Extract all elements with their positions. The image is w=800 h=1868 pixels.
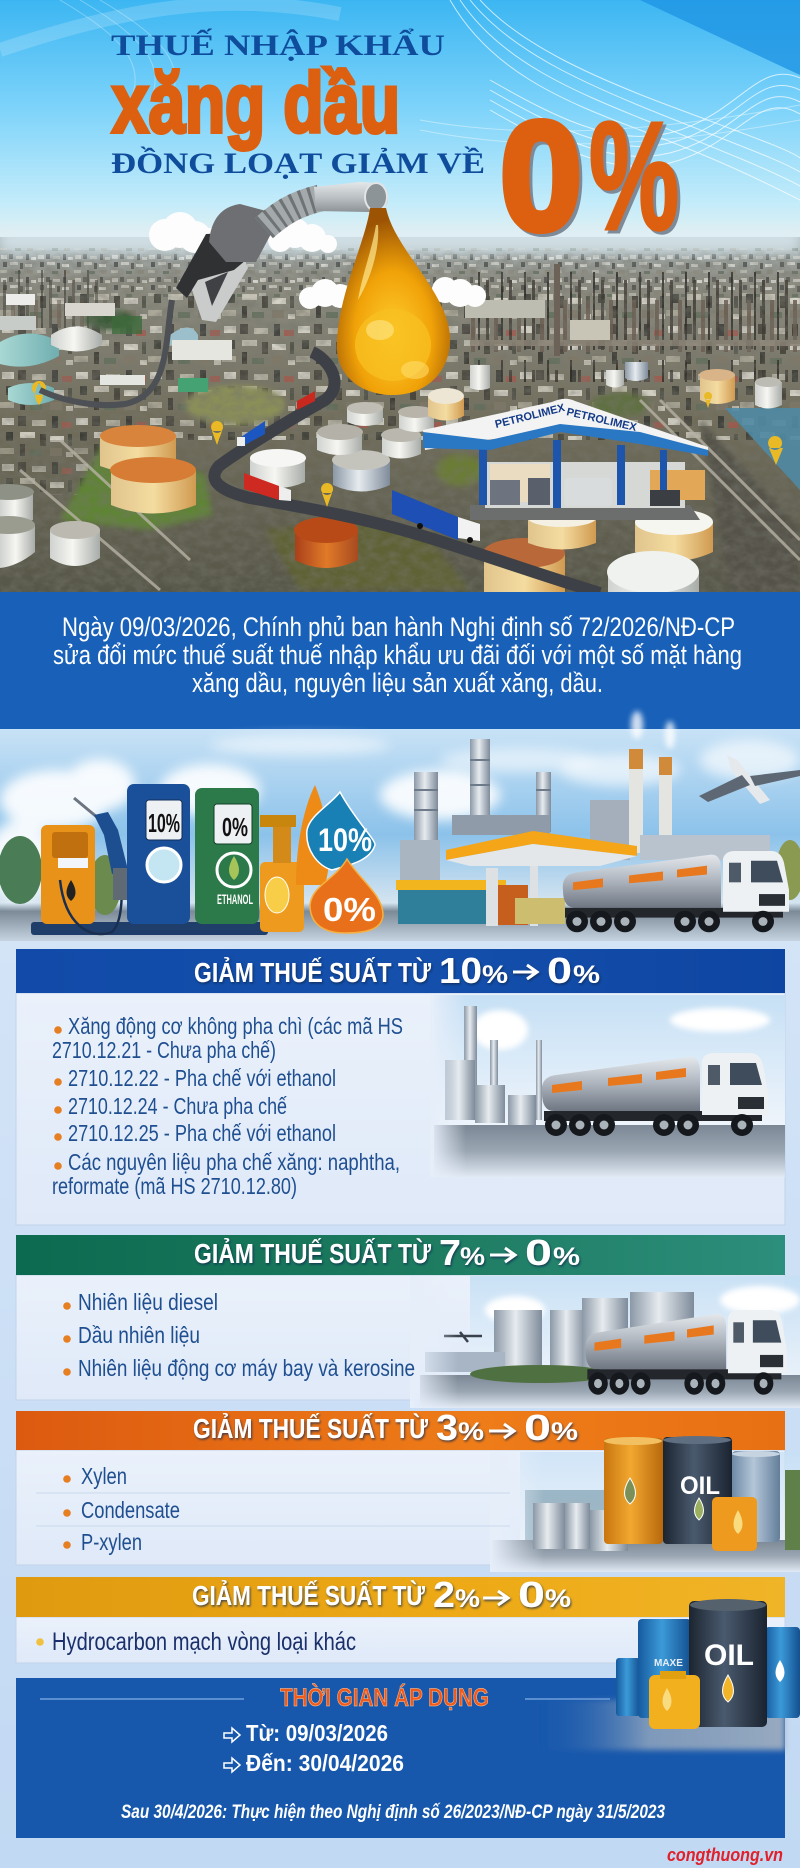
upper left tanks [0,334,59,367]
panel heading: GIẢM THUẾ SUẤT TỪ [193,1412,429,1444]
decorative light waves [0,0,800,200]
dates: Từ: 09/03/2026 [246,1720,388,1746]
panel heading: 0 [524,1407,551,1448]
title [111,28,682,265]
city ground [0,237,800,593]
intro text: xăng dầu, nguyên liệu sản xuất xăng, dầu. [192,668,603,698]
panel heading: 7 [439,1232,461,1273]
panel heading: % [553,1243,580,1271]
title line 1: THUẾ NHẬP KHẨU [111,28,445,62]
green pump [195,788,259,924]
panel: giảm thuế suất từ 2% [16,1574,785,1663]
barrels group [616,1599,800,1729]
silver cans [533,1503,565,1549]
storage tanks [0,294,713,593]
truck red [244,473,291,501]
panel: thời gian áp dụng [16,1678,785,1838]
dates: Đến: 30/04/2026 [246,1750,404,1776]
panel header [16,1411,785,1450]
fuel station [423,399,708,520]
divider lines [40,1698,610,1700]
dark barrel [663,1437,732,1544]
panel body [16,993,785,1225]
panel image: storage tanks and tanker [410,1276,800,1408]
panel heading [193,1407,578,1448]
panel body [16,1275,785,1400]
list 10 percent: 2710.12.25 - Pha chế với ethanol [68,1120,336,1146]
big 0 percent: 0 [503,93,585,265]
list 3 percent [36,1463,510,1555]
panel title: THỜI GIAN ÁP DỤNG [280,1682,489,1712]
clouds behind nozzle [149,212,486,309]
panel heading: GIẢM THUẾ SUẤT TỪ [192,1579,426,1611]
panel background [16,1678,785,1838]
list 10 percent: 2710.12.24 - Chưa pha chế [68,1093,287,1119]
list 2 percent: Hydrocarbon mạch vòng loại khác [52,1628,356,1656]
drop 0 percent [310,859,383,933]
oil drop [337,208,450,395]
green pump: ETHANOL [217,891,253,907]
petrolimex signs: PETROLIMEX [494,402,567,431]
hero sky [0,0,800,240]
note: Sau 30/4/2026: Thực hiện theo Nghị định số 26/2023/NĐ-CP ngày 31/5/2023 [121,1802,665,1823]
chimney [554,264,560,356]
drop 0 percent: 0% [323,891,376,928]
land patches [60,310,800,593]
fuel station: PETROLIMEX [565,406,638,434]
title line 3: ĐỒNG LOẠT GIẢM VỀ [111,146,485,180]
drop 10 percent: 10% [318,822,372,858]
panel heading: 2 [433,1574,455,1615]
horizon haze [0,228,800,254]
green pump: 0% [222,812,248,842]
illustration: pumps, refinery and tanker [0,711,800,941]
page background [0,729,800,1868]
small blue barrel [616,1658,640,1716]
blue pump [127,784,190,924]
truck blue [392,490,480,543]
panel header [16,949,785,993]
refinery [400,739,770,890]
panel heading: % [573,961,600,989]
station canopy [423,399,708,455]
orange barrel [604,1438,663,1544]
airplane [699,755,800,804]
big 0 percent [500,90,682,265]
panel heading: % [545,1585,571,1613]
dates [224,1720,404,1776]
water basin [725,408,800,490]
tanks small refinery right [465,300,782,408]
station columns [479,440,667,508]
panel heading: GIẢM THUẾ SUẤT TỪ [194,1237,432,1269]
ground patch [535,1700,785,1750]
list 10 percent: 2710.12.22 - Pha chế với ethanol [68,1065,336,1091]
panel heading: GIẢM THUẾ SUẤT TỪ [194,956,432,988]
intro band [0,592,800,729]
city texture [0,250,800,593]
rust tanks [100,436,176,473]
panel header [16,1235,785,1275]
panel heading: 3 [436,1407,458,1448]
list 3 percent: P-xylen [81,1529,142,1555]
orange pump [41,825,95,924]
list 10 percent: 2710.12.21 - Chưa pha chế) [52,1037,276,1063]
panel heading [194,1232,580,1273]
lower buildings [0,430,110,495]
base plate [31,922,268,935]
station building [485,462,685,508]
nozzle top [209,204,272,262]
dark oil barrel: OIL [704,1639,754,1672]
station forecourt [470,505,700,520]
hero illustration [0,0,800,593]
grey barrel [732,1451,780,1542]
panel: giảm thuế suất từ 10% [16,949,785,1225]
panel heading: % [460,1243,485,1271]
clouds [0,735,800,900]
panel body [16,1450,785,1565]
location pins [32,381,783,507]
panel image: barrels [490,1436,800,1572]
list 7 percent: Nhiên liệu diesel [78,1289,218,1315]
van [564,478,612,506]
list 10 percent: Xăng động cơ không pha chì (các mã HS [68,1013,403,1039]
orange cone [296,785,329,885]
illustration sky [0,729,800,941]
list 10 percent: reformate (mã HS 2710.12.80) [52,1173,297,1199]
panel heading: % [455,1585,480,1613]
white tanks [250,458,305,488]
smoke [631,711,675,749]
big 0 percent: % [589,90,679,262]
intro text [53,612,742,698]
panel image: tanker and refinery [430,995,785,1177]
yellow jerry can [649,1671,700,1729]
blue barrel: MAXE [654,1658,683,1669]
list 10 percent [52,1013,403,1199]
road [214,352,600,593]
panel image: barrels: OIL [680,1472,720,1500]
title line 2: xăng dầu [112,56,400,150]
list 3 percent: Condensate [81,1497,180,1523]
list 10 percent: Các nguyên liệu pha chế xăng: naphtha, [68,1149,400,1175]
source credit: congthuong.vn [667,1845,783,1865]
fuel nozzle [176,182,388,322]
fuel hose [40,300,172,405]
mid buildings [0,290,800,440]
list 7 percent [63,1289,415,1381]
distant buildings [0,248,800,298]
panel heading [194,950,600,991]
dark oil barrel [689,1599,767,1727]
drop 10 percent [307,792,375,870]
cream tanks [528,518,596,550]
blue barrel [638,1619,691,1718]
panel heading: 10 [439,950,482,991]
panel heading: % [551,1418,578,1446]
gas station small [396,831,637,926]
panel heading: % [458,1418,484,1446]
refinery towers [470,272,800,382]
right blue barrel [765,1627,800,1718]
orange bottle [260,815,304,932]
small red truck [297,391,315,410]
pipelines [20,400,800,590]
list 7 percent: Nhiên liệu động cơ máy bay và kerosine [78,1355,415,1381]
handle [176,232,264,298]
trees [0,836,800,915]
big 0 percent: % [592,93,682,265]
panel heading: 0 [518,1574,545,1615]
hose nozzle [60,798,128,934]
panel heading: 0 [525,1232,552,1273]
big 0 percent: 0 [500,90,582,262]
spout [314,182,388,212]
trigger guard [186,258,248,322]
panel heading [192,1574,571,1615]
panel heading: 0 [547,950,572,991]
left tanks [0,492,33,530]
small blue truck [237,421,265,447]
blue pump: 10% [148,808,180,838]
panel: giảm thuế suất từ 7% [16,1232,800,1408]
panel heading: % [482,961,508,989]
panel header [16,1577,785,1617]
panel body [16,1617,785,1663]
orange jerry can [712,1497,757,1551]
ribbed neck [264,198,320,228]
panel: giảm thuế suất từ 3% [16,1407,800,1572]
list 7 percent: Dầu nhiên liệu [78,1322,200,1348]
list 3 percent: Xylen [81,1463,127,1489]
tanker truck [563,851,789,932]
